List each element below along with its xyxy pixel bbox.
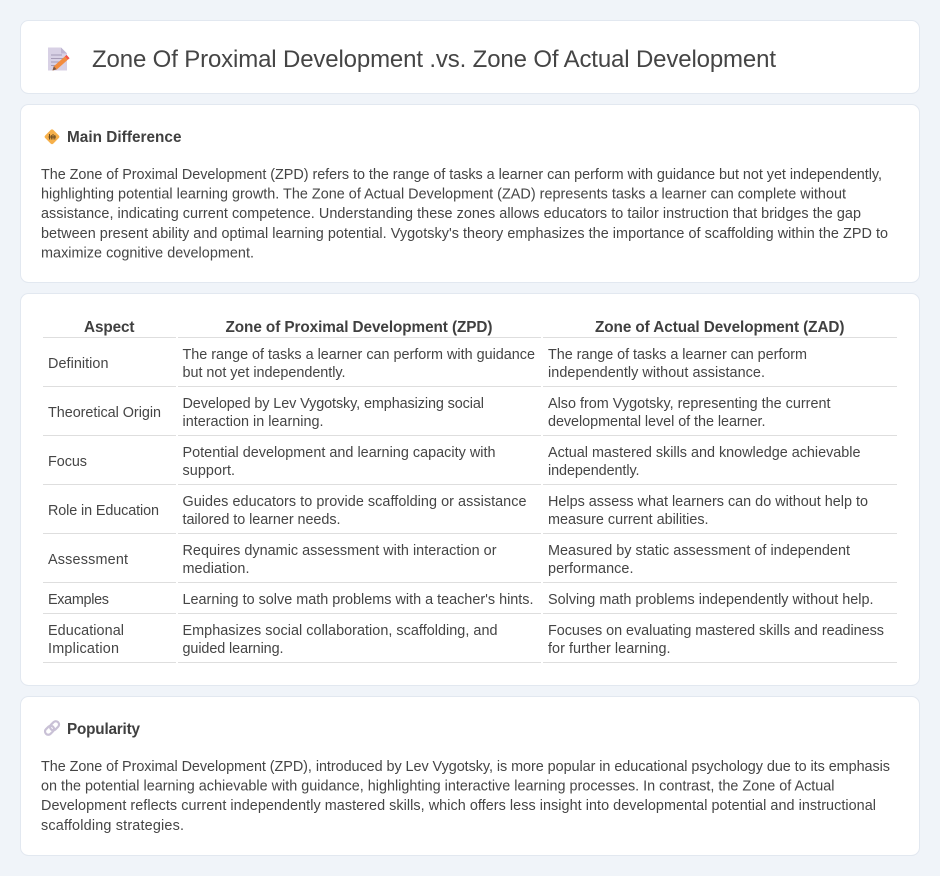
- row: focus: Potential development and learning capacity with: [182, 445, 496, 461]
- row: assessment: Assessment: [48, 552, 128, 568]
- row: definition: but not yet independently.: [182, 365, 346, 381]
- row: educational implication: Implication: [48, 641, 119, 657]
- row: role in education: Guides educators to provide scaffolding or assistance: [182, 494, 526, 510]
- row: role in education: Role in Education: [48, 503, 159, 519]
- heading: popularity: Popularity: [67, 721, 140, 738]
- heading: main difference: Main Difference: [67, 129, 182, 146]
- row: focus: independently.: [548, 463, 640, 479]
- row: educational implication: [43, 623, 897, 663]
- panel: comparison table: [20, 294, 920, 686]
- text block: popularity paragraph: scaffolding strategies.: [41, 818, 184, 834]
- row: focus: support.: [182, 463, 235, 479]
- row: theoretical origin: Also from Vygotsky, representing the current: [548, 396, 830, 412]
- table header row: Aspect: [84, 319, 134, 336]
- row: assessment: mediation.: [182, 561, 250, 577]
- row: examples: Solving math problems independently without help.: [548, 592, 874, 608]
- text block: main difference paragraph: [41, 167, 888, 261]
- row: assessment: Measured by static assessment of independent: [548, 543, 850, 559]
- table header row: Zone of Actual Development (ZAD): [595, 319, 844, 336]
- icon: chain link: [44, 720, 60, 736]
- row: educational implication: Focuses on evaluating mastered skills and readiness: [548, 623, 884, 639]
- row: theoretical origin: Theoretical Origin: [48, 405, 161, 421]
- table header row: [43, 319, 897, 338]
- row: theoretical origin: interaction in learning.: [182, 414, 324, 430]
- row: assessment: performance.: [548, 561, 634, 577]
- text block: main difference paragraph: highlighting potential learning growth. The Zone of Actual Development (ZAD) represents tasks a learner can complete without: [41, 187, 846, 203]
- row: definition: Definition: [48, 356, 108, 372]
- row: role in education: measure current abilities.: [548, 512, 708, 528]
- text block: main difference paragraph: assistance, indicating current competence. Understanding these zones allows educators to tailor instruction that bridges the gap: [41, 206, 861, 222]
- row: assessment: Requires dynamic assessment with interaction or: [182, 543, 497, 559]
- panel: popularity: [20, 696, 920, 856]
- row: focus: Actual mastered skills and knowledge achievable: [548, 445, 860, 461]
- row: focus: [43, 445, 897, 485]
- row: definition: [43, 347, 897, 387]
- panel: main difference: [20, 104, 920, 282]
- text block: popularity paragraph: [41, 759, 890, 834]
- row: educational implication: Educational: [48, 623, 124, 639]
- icon: memo with pencil: [48, 48, 70, 70]
- row: theoretical origin: developmental level of the learner.: [548, 414, 766, 430]
- row: role in education: Helps assess what learners can do without help to: [548, 494, 868, 510]
- row: definition: The range of tasks a learner can perform: [548, 347, 807, 363]
- row: theoretical origin: [43, 396, 897, 436]
- row: role in education: tailored to learner needs.: [182, 512, 340, 528]
- title: Zone Of Proximal Development .vs. Zone Of Actual Development: [92, 46, 776, 73]
- row: focus: Focus: [48, 454, 87, 470]
- row: definition: The range of tasks a learner can perform with guidance: [182, 347, 535, 363]
- text block: main difference paragraph: between present ability and optimal learning potential. Vygotsky's theory emphasizes the importance of scaffolding within the ZPD to: [41, 226, 888, 242]
- text block: popularity paragraph: Development reflects current independently mastered skills, which offers less insight into developmental potential and instructional: [41, 798, 876, 814]
- row: examples: Examples: [48, 592, 109, 608]
- row: examples: [43, 592, 897, 614]
- row: educational implication: for further learning.: [548, 641, 670, 657]
- text block: main difference paragraph: maximize cognitive development.: [41, 245, 254, 261]
- text block: popularity paragraph: The Zone of Proximal Development (ZPD), introduced by Lev Vygotsky, is more popular in educational psychology due to its emphasis: [41, 759, 890, 775]
- row: educational implication: guided learning.: [182, 641, 284, 657]
- row: definition: independently without assistance.: [548, 365, 765, 381]
- icon: children crossing diamond: [44, 129, 60, 145]
- row: examples: Learning to solve math problems with a teacher's hints.: [182, 592, 534, 608]
- row: educational implication: Emphasizes social collaboration, scaffolding, and: [182, 623, 498, 639]
- table header row: Zone of Proximal Development (ZPD): [226, 319, 492, 336]
- row: assessment: [43, 543, 897, 583]
- panel: title header: [20, 20, 920, 94]
- row: role in education: [43, 494, 897, 534]
- text block: popularity paragraph: on the potential learning achievable with guidance, highlighting interactive learning processes. In contrast, the Zone of Actual: [41, 779, 834, 795]
- text block: main difference paragraph: The Zone of Proximal Development (ZPD) refers to the range of tasks a learner can perform with guidance but not yet independently,: [41, 167, 882, 183]
- row: theoretical origin: Developed by Lev Vygotsky, emphasizing social: [182, 396, 484, 412]
